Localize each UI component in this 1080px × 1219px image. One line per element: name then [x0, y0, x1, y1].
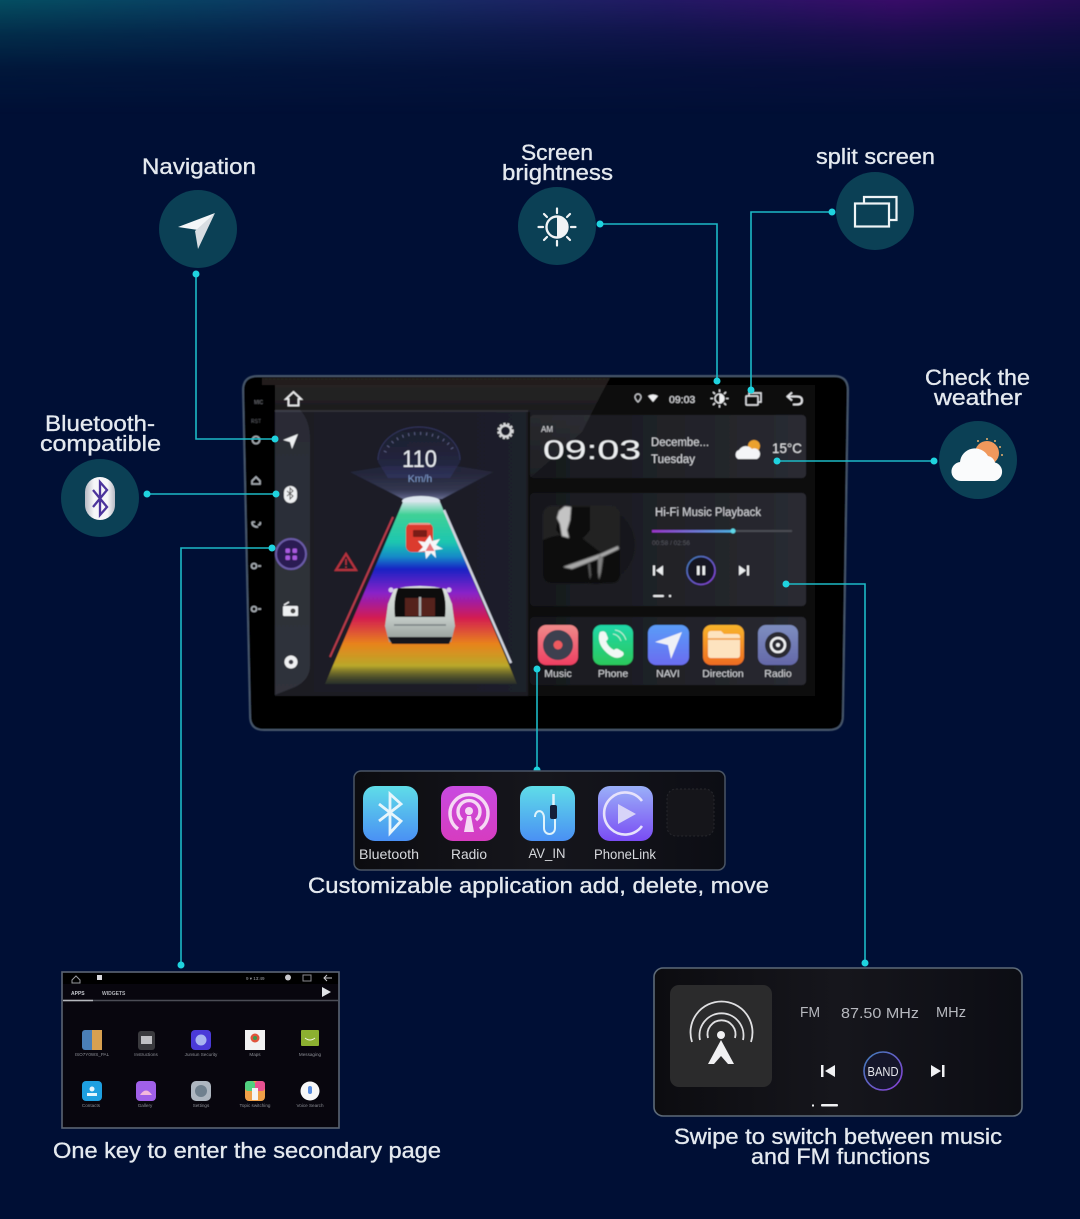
- app: bluetooth: [359, 786, 419, 862]
- feature: check the weather: Check the: [925, 365, 1030, 390]
- icon: navigation arrow: [159, 190, 237, 268]
- secondary icon grid: Topic switching: [240, 1103, 271, 1108]
- secondary icon grid: [75, 1030, 324, 1108]
- status bar icons: 09:03: [669, 394, 695, 406]
- icon: split screen windows: [836, 172, 914, 250]
- clock and weather panel: 15°C: [772, 440, 802, 456]
- clock and weather panel: [530, 415, 806, 478]
- page background: [0, 0, 1080, 68]
- empty app slot: [667, 789, 714, 836]
- app: av in: AV_IN: [528, 845, 566, 861]
- caption: swipe to switch: Swipe to switch between music: [674, 1124, 1002, 1149]
- clock and weather panel: AM: [541, 425, 553, 434]
- panel: secondary page screenshot: APPS: [71, 991, 85, 997]
- icon: bluetooth: [61, 459, 139, 537]
- warning triangle: [336, 554, 356, 570]
- icon: sidebar radio: [283, 602, 298, 616]
- secondary icon grid: Instructions: [134, 1052, 158, 1057]
- icon: split status: [746, 393, 761, 405]
- feature: split screen: [816, 144, 935, 250]
- music player panel: Hi-Fi Music Playback: [655, 507, 761, 519]
- app: phone: [593, 625, 633, 680]
- screen body right: [528, 410, 815, 696]
- feature: check the weather: [925, 365, 1030, 499]
- screen top bar: [275, 385, 815, 410]
- app: phonelink: PhoneLink: [594, 846, 657, 862]
- clock and weather panel: Tuesday: [651, 454, 695, 466]
- panel: secondary page screenshot: WIDGETS: [102, 991, 126, 997]
- secondary icon grid: Junsun Security: [185, 1052, 218, 1057]
- app: navi: NAVI: [656, 668, 680, 680]
- speed gauge: Km/h: [408, 473, 432, 485]
- white car: [385, 586, 455, 644]
- icon: home: [286, 392, 301, 406]
- radio frequency: MHz: [936, 1005, 966, 1021]
- speed gauge: 110: [402, 446, 437, 473]
- rainbow road: [325, 502, 517, 684]
- hardware side buttons: RST: [251, 419, 261, 425]
- icon: brightness status: [710, 390, 728, 408]
- app: radio: [758, 625, 798, 680]
- icon: sidebar bluetooth: [284, 486, 297, 503]
- secondary icon grid: Maps: [249, 1052, 261, 1057]
- feature: screen brightness: [502, 140, 613, 265]
- hardware side buttons: MIC: [254, 400, 264, 406]
- app dock panel: [530, 617, 806, 685]
- app: navi: [648, 625, 689, 680]
- icon: small weather: [736, 440, 760, 459]
- secondary icon grid: Settings: [193, 1103, 210, 1108]
- secondary icon grid: Gallery: [138, 1103, 153, 1108]
- connector dots: [144, 208, 938, 968]
- app: av in: [520, 786, 575, 861]
- icon: sidebar settings: [284, 656, 298, 668]
- icon: sidebar navigation: [283, 434, 298, 449]
- caption: customizable application: Customizable application add, delete, move: [308, 873, 769, 898]
- progress bar: [652, 528, 792, 534]
- music player panel: [530, 493, 806, 606]
- caption: secondary page: One key to enter the secondary page: [53, 1138, 441, 1163]
- app: direction: [702, 625, 744, 680]
- playback controls: [653, 556, 749, 597]
- clock and weather panel: 09:03: [543, 435, 641, 465]
- app: phone: Phone: [598, 668, 628, 680]
- app: bluetooth: Bluetooth: [359, 846, 419, 862]
- app: direction: Direction: [702, 668, 744, 680]
- status bar icons: [635, 390, 802, 408]
- feature: screen brightness: brightness: [502, 160, 613, 185]
- panel: customizable apps: [354, 771, 725, 870]
- feature: bluetooth: [40, 411, 161, 537]
- icon: app drawer button: [276, 539, 306, 569]
- radio frequency: 87.50 MHz: [841, 1006, 919, 1022]
- secondary icon grid: Messaging: [299, 1052, 322, 1057]
- album cover: [543, 506, 635, 584]
- radio frequency: FM: [800, 1005, 820, 1021]
- caption: swipe to switch: [674, 1124, 1002, 1169]
- connector lines: [147, 212, 934, 965]
- feature: bluetooth: Bluetooth-: [45, 411, 155, 436]
- caption: swipe to switch: and FM functions: [751, 1144, 930, 1169]
- panel: FM radio: [654, 968, 1022, 1116]
- secondary icon grid: Contacts: [82, 1103, 101, 1108]
- lane edges: [330, 510, 511, 663]
- app: radio: Radio: [764, 668, 792, 680]
- head unit monitor: [243, 376, 848, 730]
- secondary icon grid: ISO7Y0WS_PAL: [75, 1052, 110, 1057]
- red car: [406, 523, 443, 559]
- app: radio podcast: Radio: [451, 846, 487, 862]
- feature: check the weather: weather: [933, 385, 1022, 410]
- screen body left: [275, 410, 528, 696]
- feature: screen brightness: Screen: [521, 140, 593, 165]
- feature: navigation: Navigation: [142, 154, 256, 179]
- secondary top bar: 9 ▾ 13:49: [246, 976, 265, 981]
- feature: split screen: split screen: [816, 144, 935, 169]
- icon: settings gear: [498, 424, 513, 438]
- BAND button: [864, 1052, 902, 1090]
- radio frequency: [800, 1005, 966, 1022]
- icon: brightness sun: [518, 187, 596, 265]
- secondary icon grid: Voice Search: [296, 1103, 324, 1108]
- app: music: Music: [544, 668, 572, 680]
- icon: sun and cloud: [939, 421, 1017, 499]
- panel: secondary page screenshot: [62, 972, 339, 1128]
- icon: back arrow: [788, 392, 802, 404]
- radio art: [670, 985, 772, 1087]
- screen glare: [262, 378, 610, 478]
- speed gauge: [350, 427, 493, 506]
- app: music: [538, 625, 578, 680]
- driving assist panel: [314, 412, 526, 692]
- app: phonelink: [594, 786, 657, 862]
- clock and weather panel: Decembe...: [651, 437, 709, 449]
- BAND button: BAND: [868, 1065, 898, 1079]
- left sidebar: [275, 392, 310, 695]
- secondary top bar: [63, 973, 338, 984]
- app: radio podcast: [441, 786, 497, 862]
- radio controls: [812, 1065, 944, 1106]
- feature: bluetooth: compatible: [40, 431, 161, 456]
- music player panel: 00:58 / 02:56: [652, 540, 690, 547]
- feature: navigation: [142, 154, 256, 268]
- hardware side buttons: [251, 400, 264, 612]
